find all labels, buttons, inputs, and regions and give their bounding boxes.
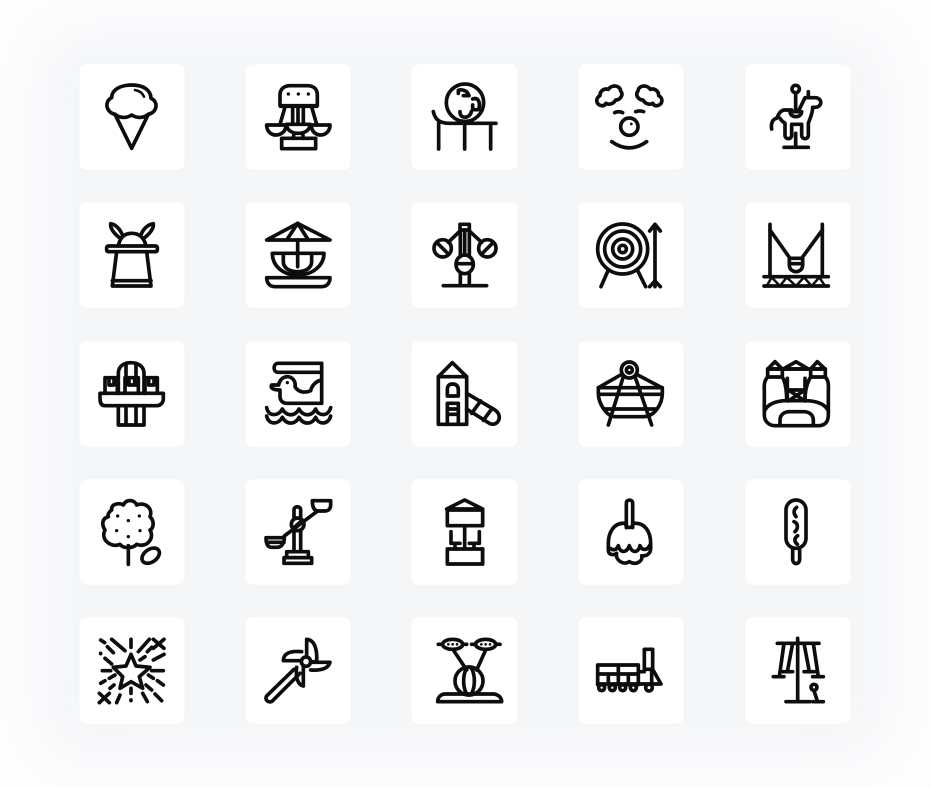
card: bungee ride	[745, 202, 851, 308]
card: duck boat	[245, 341, 351, 447]
card: carousel horse	[745, 64, 851, 170]
card: small carousel	[411, 479, 518, 585]
icon: train	[598, 649, 661, 691]
icon: sparkling star	[99, 639, 164, 703]
card: teacup ride	[245, 202, 351, 308]
card: train	[578, 617, 684, 724]
icon: teacup ride	[267, 223, 330, 287]
icon: rabbit in magic hat	[107, 224, 157, 286]
card: sparkler star	[79, 617, 185, 724]
card: bouncy castle	[745, 341, 851, 447]
card: archery target	[578, 202, 684, 308]
icon: saucer ride	[438, 639, 502, 702]
icon: candy apple	[608, 500, 651, 563]
icon: seesaw ride	[266, 501, 331, 563]
icon: cotton candy	[103, 501, 162, 566]
card: pinwheel	[245, 617, 351, 724]
icon: pinwheel	[266, 639, 330, 702]
icon: pirate ship ride	[598, 362, 662, 425]
card: playground slide	[411, 341, 518, 447]
card: swing ride with lever	[745, 617, 851, 724]
icon: corn dog	[786, 500, 806, 563]
card: candy apple	[578, 479, 684, 585]
card: saucer ride	[411, 617, 518, 724]
icon: clown face	[597, 86, 662, 148]
card: corn dog	[745, 479, 851, 585]
card: tower drop ride	[79, 341, 185, 447]
icon: bouncy castle	[764, 362, 828, 426]
card: roller coaster loop	[411, 64, 518, 170]
icon: carousel horse	[771, 85, 821, 147]
icon: tower ride with seats	[100, 363, 163, 425]
icon: pendulum swing ride	[434, 224, 496, 286]
icon: duck boat on water	[267, 363, 331, 423]
icon: ice cream cone	[107, 85, 156, 148]
icon: small carousel	[447, 500, 483, 564]
card: magic hat	[79, 202, 185, 308]
card: clown face	[578, 64, 684, 170]
card: seesaw ride	[245, 479, 351, 585]
card: ice cream	[79, 64, 185, 170]
card: cotton candy	[79, 479, 185, 585]
card: pirate ship ride	[578, 341, 684, 447]
icon: chair swing ride	[267, 86, 330, 149]
icon: roller coaster loop	[433, 84, 496, 149]
icon: archery target and arrow	[598, 224, 660, 287]
card: chair swing ride	[245, 64, 351, 170]
icon: bungee ride	[764, 224, 828, 286]
icon: swing ride with lever	[773, 638, 823, 702]
card: pendulum swing ride	[411, 202, 518, 308]
icon: slide tower	[438, 363, 499, 424]
